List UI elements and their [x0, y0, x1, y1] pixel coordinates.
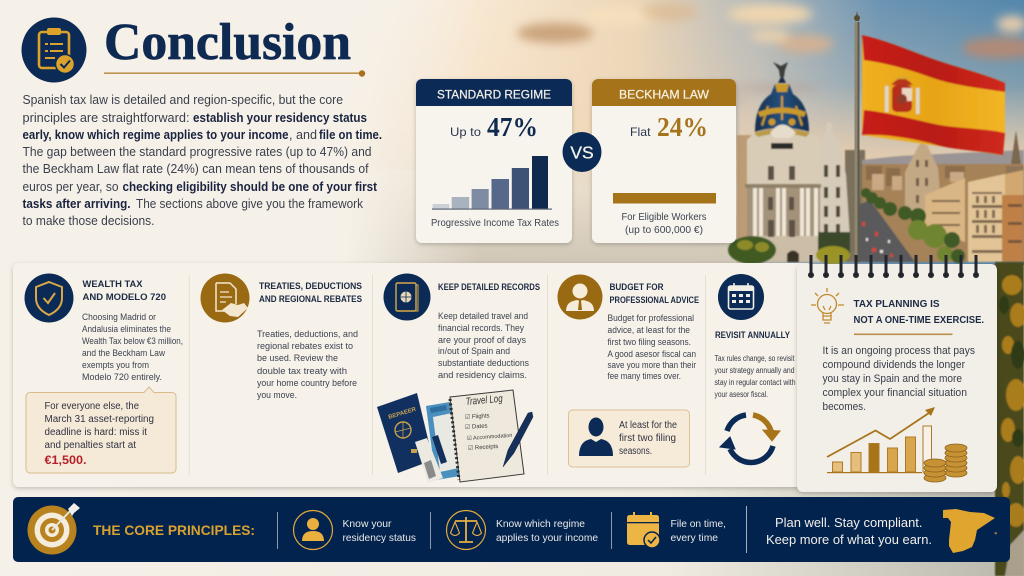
panel: notepad: TAX PLANNING IS — [854, 298, 940, 310]
section: records: financial records. They — [438, 323, 525, 333]
section: records: Keep detailed travel and — [438, 311, 528, 321]
card: standard regime: Progressive Income Tax Rates — [431, 217, 559, 229]
principle: residency — [294, 510, 416, 550]
icon: calendar — [718, 274, 764, 320]
card: Beckham law: BECKHAM LAW — [619, 88, 710, 102]
icon: clipboard with check — [22, 18, 86, 82]
intro paragraph: euros per year, so — [22, 179, 118, 194]
panel: notepad: complex your financial situation — [822, 387, 967, 399]
travel log notebook — [450, 390, 524, 482]
callout: March 31 deadline: March 31 asset-reporting — [44, 414, 154, 425]
callout: March 31 deadline: and penalties start at — [44, 440, 136, 451]
principle: regime: Know which regime — [496, 519, 585, 530]
intro paragraph: principles are straightforward: — [22, 110, 190, 125]
panel: notepad: you stay in Spain and the more — [822, 373, 962, 385]
card: standard regime — [416, 79, 572, 243]
callout: March 31 deadline: deadline is hard: miss it — [44, 427, 147, 438]
section: professional advice: save you more than their — [608, 360, 696, 370]
intro paragraph: The gap between the standard progressive rates (up to 47%) and — [22, 144, 372, 159]
intro paragraph: the Beckham Law flat rate (24%) can mean tens of thousands of — [22, 161, 369, 176]
icon: passport — [384, 274, 430, 320]
intro paragraph: establish your residency status — [193, 110, 367, 125]
icon: advisor — [558, 274, 602, 320]
section: revisit annually: your asesor fiscal. — [714, 390, 768, 399]
icon: target with arrow — [28, 503, 80, 554]
card: Beckham law: For Eligible Workers — [622, 212, 706, 223]
travel log notebook: ☑ Accommodation — [467, 432, 513, 442]
principle: residency: Know your — [342, 519, 392, 530]
section: wealth tax: Andalusia eliminates the — [82, 324, 171, 334]
panel: notepad — [797, 255, 997, 492]
callout: first two filing seasons — [568, 410, 690, 467]
callout: first two filing seasons: seasons. — [619, 446, 652, 457]
VS badge — [562, 132, 602, 172]
section: records: in/out of Spain and — [438, 346, 510, 356]
card: Beckham law: Flat — [630, 125, 651, 139]
intro paragraph: to make those decisions. — [22, 213, 154, 228]
illustration: passport, boarding pass and travel log — [377, 390, 533, 483]
section: revisit annually: your strategy annually and — [714, 366, 794, 375]
icon: cycle arrows — [720, 415, 780, 462]
card: Beckham law: 24% — [657, 112, 708, 142]
principle: file on time: every time — [670, 533, 718, 544]
boarding pass — [426, 402, 460, 480]
coin stacks — [924, 444, 967, 482]
card: standard regime: Up to — [450, 125, 481, 139]
banner: core principles — [13, 497, 1010, 562]
section: treaties: TREATIES, DEDUCTIONS — [259, 281, 362, 292]
travel log notebook: Travel Log — [465, 393, 503, 408]
principle: regime — [446, 510, 598, 550]
principle: file on time: File on time, — [670, 519, 726, 530]
VS badge: VS — [570, 142, 594, 162]
section: records — [377, 274, 540, 483]
chart: growth with coins — [827, 407, 967, 482]
bar chart: progressive rates — [432, 156, 552, 210]
travel log notebook: ☑ Flights — [465, 412, 490, 421]
intro paragraph: early, know which regime applies to your income — [22, 127, 288, 142]
section: treaties: double tax treaty with — [257, 366, 347, 376]
spiral rings — [808, 255, 979, 278]
section: professional advice: first two filing seasons. — [608, 337, 691, 347]
section: treaties: your home country before — [257, 378, 357, 388]
section: revisit annually — [714, 274, 796, 462]
icon: light bulb — [811, 288, 844, 323]
panel: notepad: NOT A ONE-TIME EXERCISE. — [854, 314, 984, 326]
section: revisit annually: REVISIT ANNUALLY — [715, 330, 790, 340]
travel log notebook: ☑ Dates — [465, 422, 488, 431]
ticket stub — [415, 435, 447, 483]
section: professional advice: Budget for professional — [608, 313, 694, 323]
section: professional advice: PROFESSIONAL ADVICE — [610, 295, 699, 305]
intro paragraph: tasks after arriving. — [22, 196, 130, 211]
section: revisit annually: Tax rules change, so revisit — [714, 354, 795, 363]
section: treaties: Treaties, deductions, and — [257, 329, 358, 339]
icon: map of Spain — [943, 509, 996, 553]
section: wealth tax: exempts you from — [82, 360, 149, 370]
callout: March 31 deadline: €1,500. — [44, 453, 86, 467]
section: revisit annually: stay in regular contact with — [714, 378, 796, 387]
section: wealth tax: Wealth Tax below €3 million, — [82, 336, 183, 346]
passport — [377, 393, 433, 473]
icon: document and handshake — [200, 274, 250, 322]
banner: core principles: THE CORE PRINCIPLES: — [93, 522, 255, 538]
section: records: are your proof of days — [438, 335, 527, 345]
section: professional advice: BUDGET FOR — [610, 282, 664, 292]
section: professional advice — [558, 274, 699, 467]
section: treaties — [200, 274, 362, 400]
icon: shield — [24, 274, 74, 322]
section: wealth tax — [24, 274, 183, 473]
callout: March 31 deadline: For everyone else, the — [44, 401, 140, 412]
title rule — [104, 70, 365, 77]
panel: lower advice panel — [13, 263, 813, 487]
intro paragraph — [22, 92, 382, 228]
passport: BEPAEER — [388, 407, 418, 421]
principle: residency: residency status — [342, 533, 416, 544]
section: professional advice: fee many times over. — [608, 371, 681, 381]
section: records: and residency claims. — [438, 370, 527, 380]
callout: first two filing seasons: At least for the — [619, 420, 678, 431]
section: wealth tax: Choosing Madrid or — [82, 312, 156, 322]
intro paragraph: Spanish tax law is detailed and region-specific, but the core — [22, 92, 343, 107]
intro paragraph: , and — [289, 127, 317, 142]
intro paragraph: The sections above give you the framework — [136, 196, 363, 211]
icon: person in suit — [579, 418, 613, 456]
card: Beckham law — [592, 79, 736, 243]
intro paragraph: file on time. — [319, 127, 382, 142]
panel: notepad: compound dividends the longer — [822, 359, 965, 371]
section: wealth tax: Modelo 720 entirely. — [82, 372, 162, 382]
card: Beckham law: (up to 600,000 €) — [625, 225, 703, 236]
panel: notepad: becomes. — [822, 401, 866, 413]
section: treaties: AND REGIONAL REBATES — [259, 294, 362, 305]
section: wealth tax: and the Beckham Law — [82, 348, 166, 358]
principle: file on time — [627, 512, 726, 548]
foliage: right edge — [995, 262, 1024, 576]
title: Conclusion — [104, 14, 351, 71]
section: records: KEEP DETAILED RECORDS — [438, 282, 540, 292]
pen — [503, 412, 533, 467]
Spanish flag — [862, 35, 1005, 155]
section: treaties: regional rebates exist to — [257, 341, 353, 351]
closing message — [766, 515, 932, 547]
travel log notebook: ☑ Receipts — [468, 443, 498, 452]
section: treaties: be used. Review the — [257, 353, 338, 363]
closing message: Keep more of what you earn. — [766, 532, 932, 547]
panel: notepad: It is an ongoing process that pays — [822, 345, 975, 357]
closing message: Plan well. Stay compliant. — [775, 515, 922, 530]
section: professional advice: A good asesor fiscal can — [608, 349, 696, 359]
section: wealth tax: AND MODELO 720 — [82, 292, 166, 303]
section: treaties: you move. — [257, 390, 297, 400]
card: standard regime: STANDARD REGIME — [437, 88, 551, 102]
callout: first two filing seasons: first two filing — [619, 433, 676, 444]
callout: March 31 deadline — [26, 387, 176, 473]
flat rate bar — [613, 193, 716, 204]
principle: regime: applies to your income — [496, 533, 598, 544]
intro paragraph: checking eligibility should be one of your first — [122, 179, 378, 194]
photo: Madrid cityscape — [728, 62, 1024, 264]
section: records: substantiate deductions — [438, 358, 530, 368]
flag pole — [854, 11, 860, 262]
section: wealth tax: WEALTH TAX — [82, 279, 143, 290]
section: professional advice: advice, at least for the — [608, 325, 690, 335]
card: standard regime: 47% — [487, 112, 538, 142]
